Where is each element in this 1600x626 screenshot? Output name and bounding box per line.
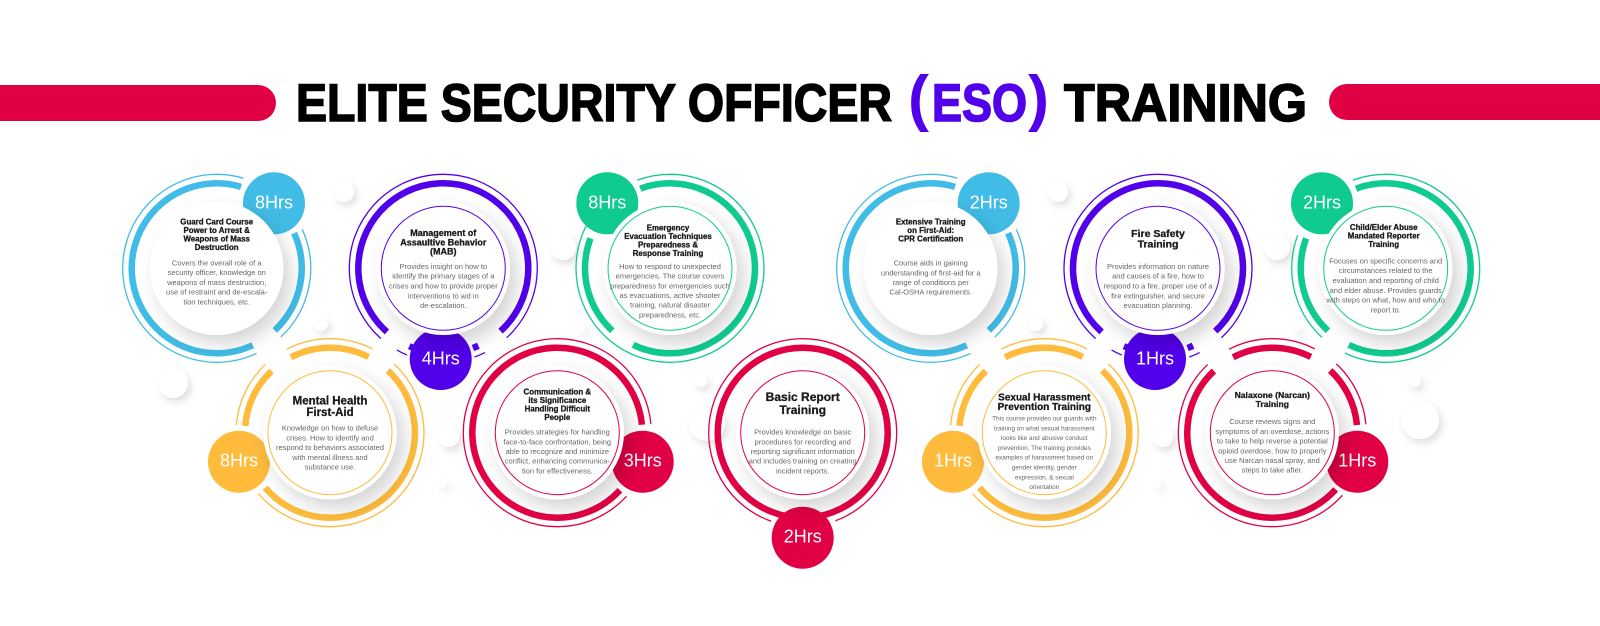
heading: Management of bbox=[410, 228, 477, 238]
description: substance use. bbox=[305, 463, 355, 472]
panel: Nalaxone (Narcan) Training bbox=[1146, 306, 1399, 559]
title: ESO bbox=[932, 74, 1027, 133]
title bbox=[296, 64, 1307, 133]
description: report to. bbox=[1371, 305, 1401, 314]
heading: Training bbox=[779, 403, 826, 417]
heading: Response Training bbox=[633, 249, 703, 258]
badge: 2Hrs bbox=[958, 172, 1020, 234]
heading: Training bbox=[1256, 399, 1289, 409]
badge: 2Hrs: 2Hrs bbox=[1303, 192, 1341, 212]
panel: Child/Elder Abuse bbox=[1265, 148, 1506, 389]
description: opioid overdose, how to properly bbox=[1218, 446, 1327, 455]
description: training on what sexual harassment bbox=[994, 426, 1095, 433]
description: tion for effectiveness. bbox=[522, 467, 593, 476]
heading: People bbox=[544, 413, 571, 422]
description: Course reviews signs and bbox=[1229, 417, 1315, 426]
heading: Mental Health bbox=[293, 396, 367, 408]
description: symptoms of an overdose, actions bbox=[1215, 427, 1329, 436]
badge: 8Hrs: 8Hrs bbox=[220, 451, 258, 471]
title: ELITE SECURITY OFFICER bbox=[296, 74, 892, 133]
panel: Basic Report Training bbox=[682, 312, 923, 569]
panel: Communication bbox=[424, 300, 690, 566]
badge: 8Hrs: 8Hrs bbox=[588, 192, 626, 212]
description: to take to help reverse a potential bbox=[1217, 437, 1328, 446]
badge: 1Hrs: 1Hrs bbox=[1136, 348, 1174, 368]
badge: 3Hrs: 3Hrs bbox=[624, 451, 662, 471]
description: This course provides our guards with bbox=[992, 416, 1097, 423]
badge: 4Hrs bbox=[410, 328, 472, 390]
description: Covers the overall role of a bbox=[172, 258, 262, 267]
description: training, natural disaster bbox=[630, 300, 711, 309]
panel: Extensive Training on First-Aid bbox=[807, 144, 1055, 392]
description: expression, & sexual bbox=[1015, 475, 1074, 482]
heading: Guard Card Course bbox=[180, 217, 254, 226]
heading: Destruction bbox=[195, 243, 239, 252]
badge: 1Hrs bbox=[1326, 431, 1388, 493]
badge: 8Hrs bbox=[576, 172, 638, 234]
heading: Preparedness & bbox=[638, 240, 698, 249]
heading: Extensive Training bbox=[896, 217, 966, 226]
title: TRAINING bbox=[1064, 74, 1307, 133]
heading: its Significance bbox=[528, 396, 587, 405]
description: Provides insight on how to bbox=[400, 262, 487, 271]
description: range of conditions per bbox=[893, 278, 969, 287]
description: emergencies. The course covers bbox=[616, 271, 725, 280]
description: with mental illness and bbox=[291, 453, 368, 462]
title: ( bbox=[908, 64, 929, 133]
description: Cal-OSHA requirements. bbox=[889, 287, 972, 296]
description: circumstances related to the bbox=[1339, 266, 1433, 275]
description: crises. How to identify and bbox=[286, 434, 374, 443]
description: Focuses on specific concerns and bbox=[1329, 256, 1442, 265]
heading: Power to Arrest & bbox=[184, 226, 250, 235]
description: interventions to aid in bbox=[408, 291, 479, 300]
description: and causes of a fire, how to bbox=[1112, 271, 1204, 280]
description: conflict, enhancing communica- bbox=[505, 457, 610, 466]
description: understanding of first-aid for a bbox=[881, 268, 981, 277]
heading: (MAB) bbox=[430, 246, 457, 256]
heading: Prevention Training bbox=[998, 402, 1091, 413]
description: preparedness, etc. bbox=[639, 310, 701, 319]
heading: CPR Certification bbox=[898, 234, 963, 243]
description: Provides strategies for handling bbox=[505, 428, 610, 437]
heading: Communication & bbox=[524, 388, 591, 397]
description: preparedness for emergencies such bbox=[610, 281, 730, 290]
heading: Evacuation Techniques bbox=[624, 232, 712, 241]
heading: Emergency bbox=[647, 223, 690, 232]
badge: 1Hrs bbox=[922, 431, 984, 493]
heading: Weapons of Mass bbox=[183, 234, 251, 243]
heading: on First-Aid: bbox=[907, 226, 954, 235]
description: How to respond to unexpected bbox=[619, 262, 721, 271]
heading: Training bbox=[1368, 240, 1399, 249]
description: Provides information on nature bbox=[1107, 262, 1209, 271]
description: looks like and abusive conduct bbox=[1001, 435, 1088, 442]
heading: Assaultive Behavior bbox=[400, 237, 487, 247]
description: face-to-face confrontation, being bbox=[504, 437, 611, 446]
description: de-escalation. bbox=[420, 301, 467, 310]
badge: 8Hrs bbox=[243, 172, 305, 234]
badge: 2Hrs: 2Hrs bbox=[970, 192, 1008, 212]
description: Course aids in gaining bbox=[894, 258, 968, 267]
description: incident reports. bbox=[776, 467, 829, 476]
heading: First-Aid bbox=[306, 407, 354, 419]
heading: Fire Safety bbox=[1131, 228, 1185, 240]
panel: Emergency Evacuation bbox=[550, 148, 790, 389]
badge: 2Hrs bbox=[772, 507, 834, 569]
right title bar bbox=[1329, 84, 1600, 120]
heading: Child/Elder Abuse bbox=[1350, 223, 1418, 232]
description: examples of harassment based on bbox=[995, 455, 1094, 462]
heading: Mandated Reporter bbox=[1348, 231, 1420, 240]
description: steps to take after. bbox=[1242, 466, 1303, 475]
badge: 1Hrs: 1Hrs bbox=[1338, 451, 1376, 471]
description: weapons of mass destruction, bbox=[166, 278, 266, 287]
panel: Sexual Harassment Prevention bbox=[918, 306, 1171, 559]
heading: Training bbox=[1138, 238, 1178, 250]
heading: Sexual Harassment bbox=[998, 393, 1091, 404]
description: orientation bbox=[1029, 484, 1060, 491]
panel: Mental Health First-Aid bbox=[204, 306, 456, 559]
description: use Narcan nasal spray, and bbox=[1225, 456, 1320, 465]
description: security officer, knowledge on bbox=[168, 268, 266, 277]
description: respond to behaviors associated bbox=[276, 443, 384, 452]
title: ) bbox=[1028, 64, 1049, 133]
description: evaluation and reporting of child bbox=[1333, 276, 1439, 285]
badge: 2Hrs bbox=[1291, 172, 1353, 234]
panel: Fire Safety Training bbox=[1025, 136, 1291, 401]
description: identify the primary stages of a bbox=[392, 271, 495, 280]
badge: 2Hrs: 2Hrs bbox=[784, 527, 822, 547]
heading: Nalaxone (Narcan) bbox=[1235, 390, 1310, 400]
description: and elder abuse. Provides guards bbox=[1330, 286, 1442, 295]
description: Provides knowledge on basic bbox=[754, 428, 852, 437]
description: respond to a fire, proper use of a bbox=[1104, 281, 1213, 290]
badge: 8Hrs bbox=[208, 431, 270, 493]
description: tion techniques, etc. bbox=[183, 297, 250, 306]
heading: Basic Report bbox=[766, 390, 840, 404]
description: evacuation planning. bbox=[1124, 301, 1192, 310]
badge: 8Hrs: 8Hrs bbox=[255, 192, 293, 212]
description: procedures for recording and bbox=[755, 437, 851, 446]
description: crises and how to provide proper bbox=[389, 281, 498, 290]
heading: Handling Difficult bbox=[525, 405, 590, 414]
decorative spheres bbox=[158, 182, 1439, 488]
description: with steps on what, how and who to bbox=[1325, 295, 1445, 304]
left title bar bbox=[0, 85, 276, 121]
description: fire extinguisher, and secure bbox=[1111, 291, 1205, 300]
description: as evacuations, active shooter bbox=[620, 291, 721, 300]
description: able to recognize and minimize bbox=[506, 447, 609, 456]
description: and includes training on creating bbox=[749, 457, 857, 466]
description: gender identity, gender bbox=[1012, 465, 1078, 472]
badge: 1Hrs: 1Hrs bbox=[934, 451, 972, 471]
badge: 4Hrs: 4Hrs bbox=[422, 348, 460, 368]
description: prevention. The training provides bbox=[998, 445, 1091, 452]
panel: Guard Card Course bbox=[93, 144, 341, 392]
description: use of restraint and de-escala- bbox=[166, 288, 268, 297]
panel: Management of Assaultive Behavior bbox=[311, 136, 576, 401]
description: reporting significant information bbox=[751, 447, 855, 456]
description: Knowledge on how to defuse bbox=[282, 424, 378, 433]
badge: 1Hrs bbox=[1124, 328, 1186, 390]
badge: 3Hrs bbox=[612, 431, 674, 493]
